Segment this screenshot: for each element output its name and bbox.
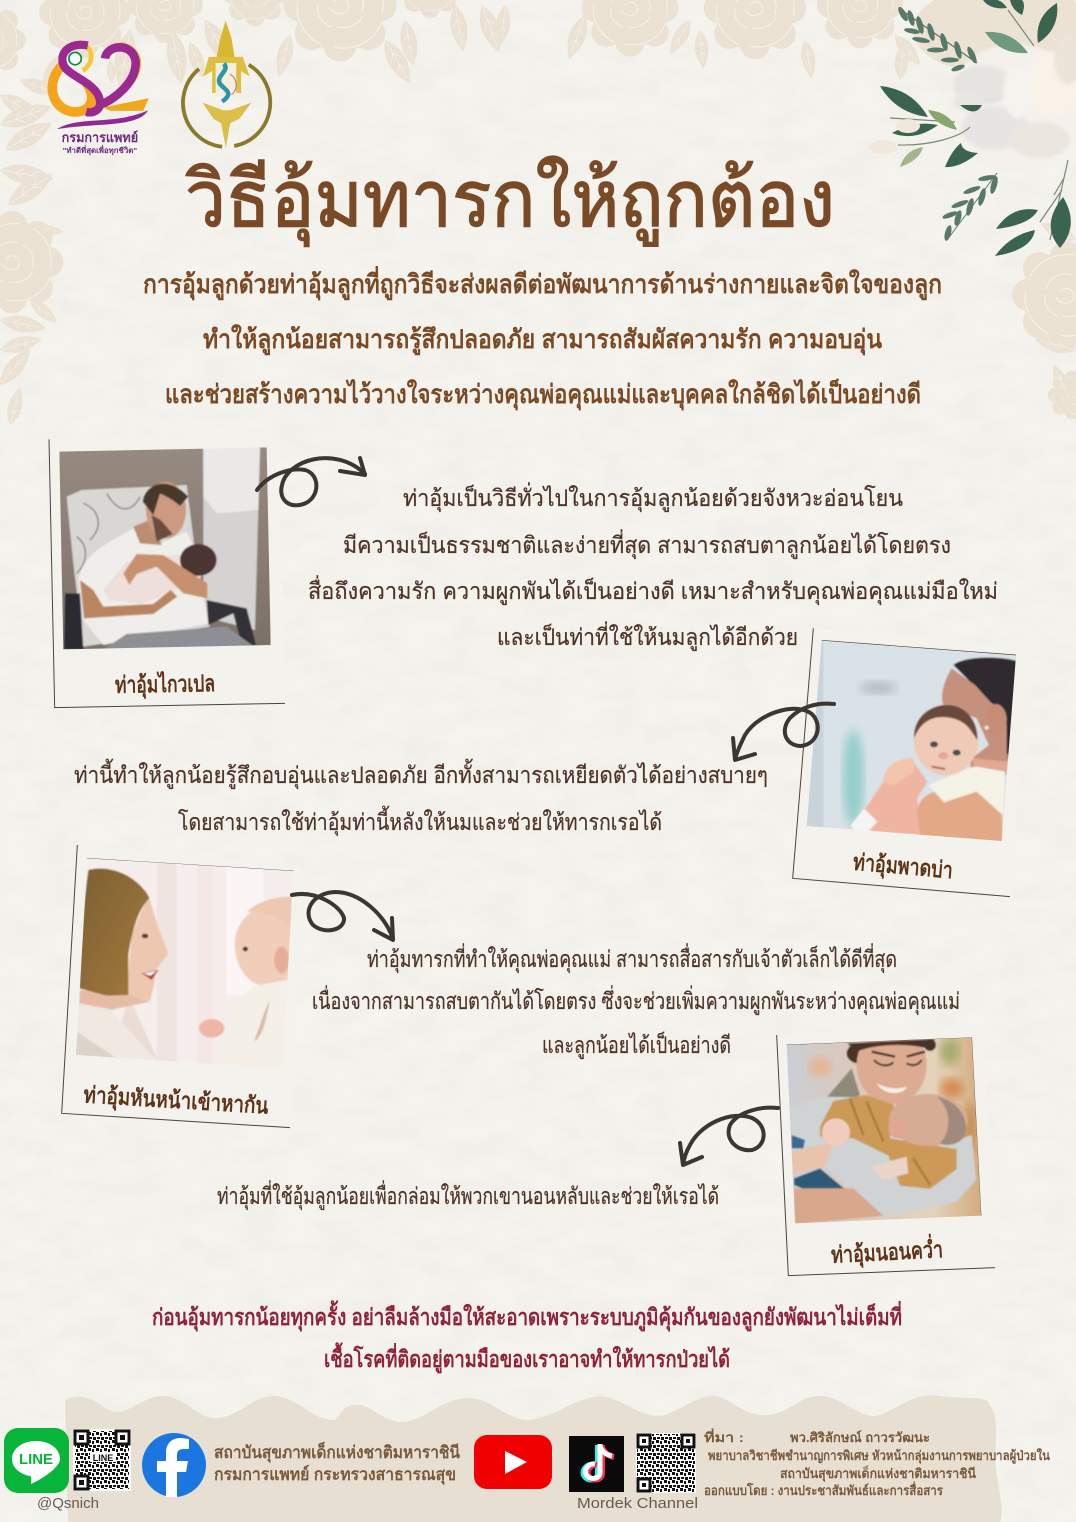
arrow: to face to face text [292, 892, 393, 940]
credits [704, 1428, 1050, 1498]
institute name: สถาบันสุขภาพเด็กแห่งชาติมหาราชินี [214, 1440, 460, 1463]
warning text [152, 1300, 902, 1374]
arrow: to tummy hold text [680, 1108, 778, 1165]
text: cradle hold: ท่าอุ้มเป็นวิธีทั่วไปในการอุ้มลูกน้อยด้วยจังหวะอ่อนโยน [403, 482, 903, 512]
title: วิธีอุ้มทารกให้ถูกต้อง [185, 155, 835, 247]
intro text: และช่วยสร้างความไว้วางใจระหว่างคุณพ่อคุณแม่และบุคคลใกล้ชิดได้เป็นอย่างดี [165, 378, 921, 411]
text: tummy hold: ท่าอุ้มที่ใช้อุ้มลูกน้อยเพื่อกล่อมให้พวกเขานอนหลับและช่วยให้เรอได้ [217, 1180, 719, 1210]
logo: child health institute emblem [183, 21, 270, 148]
caption: ท่าอุ้มนอนคว่ำ [830, 1232, 944, 1270]
text: shoulder hold [74, 759, 768, 836]
icon: LINE [4, 1428, 69, 1493]
photo card: tummy hold [777, 1026, 995, 1276]
photo: baby on mother's shoulder [803, 638, 1020, 845]
institute name: กรมการแพทย์ กระทรวงสาธารณสุข [214, 1464, 456, 1485]
arrow: to cradle hold text [257, 458, 365, 505]
icon: YouTube [474, 1435, 552, 1489]
text: cradle hold: และเป็นท่าที่ใช้ให้นมลูกได้อีกด้วย [497, 621, 798, 651]
text: cradle hold: มีความเป็นธรรมชาติและง่ายที่สุด สามารถสบตาลูกน้อยได้โดยตรง [343, 529, 951, 559]
caption: ท่าอุ้มพาดบ่า [852, 849, 954, 885]
intro text [143, 265, 942, 411]
credits: พว.ศิริลักษณ์ ถาวรวัฒนะ [790, 1430, 930, 1445]
credits: ที่มา : [704, 1428, 744, 1445]
logo: 82 years Department of Medical Services [52, 43, 149, 156]
credits: ออกแบบโดย : งานประชาสัมพันธ์และการสื่อสาร [704, 1481, 943, 1498]
channel name: Mordek Channel [577, 1495, 698, 1512]
warning text: เชื้อโรคที่ติดอยู่ตามมือของเราอาจทำให้ทารกป่วยได้ [324, 1342, 730, 1374]
photo card: cradle hold [49, 435, 285, 708]
decorative beige floral top and side borders [0, 0, 1076, 427]
text: cradle hold [308, 482, 998, 651]
text: shoulder hold: โดยสามารถใช้ท่าอุ้มท่านี้หลังให้นมและช่วยให้ทารกเรอได้ [178, 806, 662, 836]
icon: Facebook [142, 1433, 206, 1497]
photo: mother facing baby [73, 855, 297, 1072]
institute name [214, 1440, 460, 1485]
text: shoulder hold: ท่านี้ทำให้ลูกน้อยรู้สึกอบอุ่นและปลอดภัย อีกทั้งสามารถเหยียดตัวได้อย่างสบายๆ [74, 759, 768, 789]
warning text: ก่อนอุ้มทารกน้อยทุกครั้ง อย่าลืมล้างมือให้สะอาดเพราะระบบภูมิคุ้มกันของลูกยังพัฒนาไม่เต็มที่ [152, 1300, 902, 1332]
text: face to face hold: ท่าอุ้มทารกที่ทำให้คุณพ่อคุณแม่ สามารถสื่อสารกับเจ้าตัวเล็กได้ดีที่สุด [367, 943, 897, 973]
caption: ท่าอุ้มไกวเปล [115, 669, 215, 700]
photo: father cradling baby [57, 445, 273, 652]
photo: mother with sleeping baby [783, 1026, 983, 1225]
LINE QR code [73, 1429, 131, 1491]
TikTok QR code [636, 1433, 696, 1493]
photo card: face to face hold [62, 845, 302, 1128]
LINE QR code: LINE [93, 1453, 113, 1463]
LINE handle: @Qsnich [37, 1495, 99, 1512]
intro text: การอุ้มลูกด้วยท่าอุ้มลูกที่ถูกวิธีจะส่งผลดีต่อพัฒนาการด้านร่างกายและจิตใจของลูก [143, 265, 942, 301]
icon: LINE: LINE [19, 1451, 53, 1468]
logo slogan: "ทำดีที่สุดเพื่อทุกชีวิต" [63, 144, 137, 156]
intro text: ทำให้ลูกน้อยสามารถรู้สึกปลอดภัย สามารถสัมผัสความรัก ความอบอุ่น [203, 324, 882, 356]
arrow: to shoulder hold text [733, 704, 834, 760]
text: face to face hold: และลูกน้อยได้เป็นอย่างดี [542, 1030, 731, 1059]
text: cradle hold: สื่อถึงความรัก ความผูกพันได้เป็นอย่างดี เหมาะสำหรับคุณพ่อคุณแม่มือใหม่ [308, 575, 998, 605]
credits: สถาบันสุขภาพเด็กแห่งชาติมหาราชินี [780, 1464, 976, 1482]
icon: TikTok [569, 1436, 624, 1492]
floral bouquet top right [869, 0, 1076, 256]
caption: ท่าอุ้มหันหน้าเข้าหากัน [83, 1081, 269, 1121]
photo card: shoulder hold [793, 628, 1028, 897]
logo text: กรมการแพทย์ [62, 130, 138, 145]
text: face to face hold [312, 943, 960, 1059]
footer band [65, 1395, 1002, 1522]
